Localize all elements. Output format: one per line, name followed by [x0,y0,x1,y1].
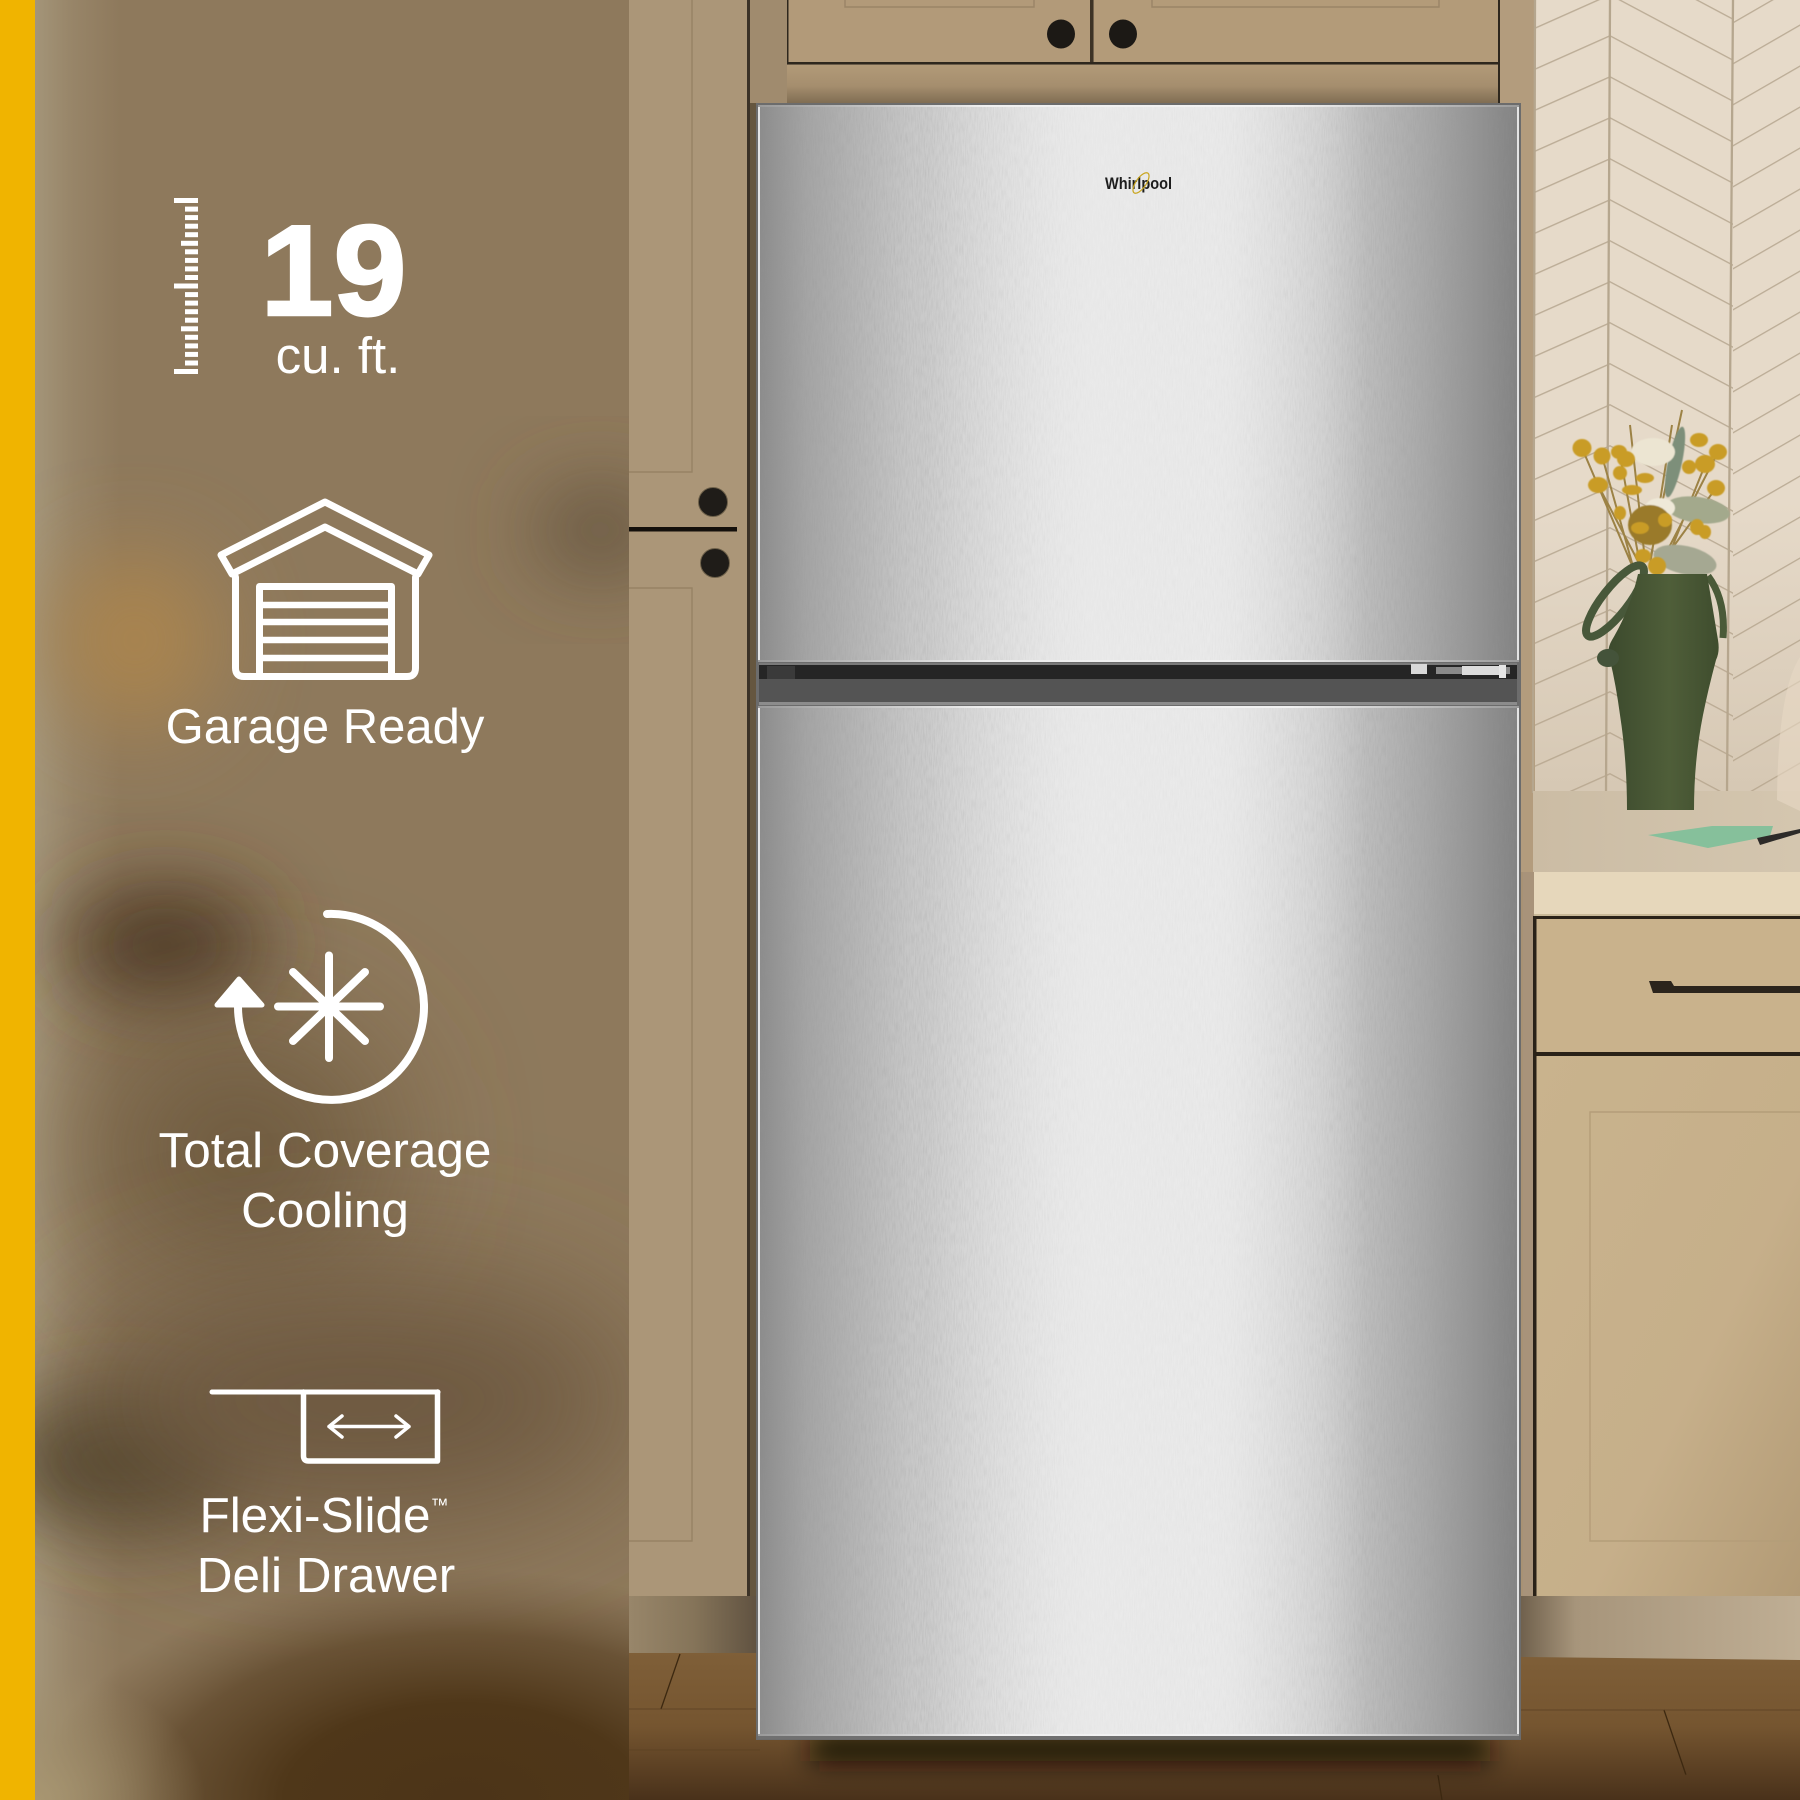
Whirlpool logo: Whirlpool [1105,174,1172,193]
flower stems [1582,410,1718,570]
frosted panel background [35,0,629,1800]
yellow flower heads [1572,433,1727,575]
center divider [759,663,1517,705]
drawer handle [1649,981,1800,993]
left vase handle [1578,558,1652,644]
vase with dried flowers [1572,410,1731,810]
upper cabinets above fridge [787,0,1535,1596]
icon: garage [221,502,429,676]
knob: left lower door [700,548,730,578]
icon: cooling arc with snowflake [217,914,424,1100]
background: kitchen scene [629,0,1800,1800]
countertop [1533,791,1800,916]
glass jar [1777,657,1800,811]
icon: sliding drawer [212,1392,438,1461]
number: 19: 19 [260,199,406,343]
label: Flexi-Slide Deli Drawer: ™ [431,1495,449,1515]
foliage [1628,425,1731,580]
icon: ruler [174,198,198,374]
yellow side bar [0,0,35,1800]
right vase handle [1708,576,1723,638]
shadow under fridge [810,1736,1490,1762]
label: Flexi-Slide Deli Drawer: Deli Drawer [197,1548,455,1603]
tile backsplash [1533,0,1800,793]
base cabinets [1533,916,1800,1596]
vase body [1608,574,1719,810]
label: Total Coverage Cooling: Total Coverage [159,1123,491,1178]
label: Flexi-Slide Deli Drawer: Flexi-Slide [199,1488,449,1543]
unit: cu. ft.: cu. ft. [276,327,400,384]
wood floor [629,1653,1800,1800]
label: Garage Ready: Garage Ready [166,700,485,754]
freezer door [758,105,1519,662]
refrigerator door [758,706,1519,1739]
knob: left upper door [698,488,728,516]
feature: garage ready [166,502,485,754]
feature: total coverage cooling [159,914,491,1238]
tall left cabinets [629,0,788,1603]
Whirlpool logo [1105,170,1172,196]
feature: flexi-slide deli drawer [197,1392,455,1603]
label: Total Coverage Cooling: Cooling [241,1183,409,1238]
baseboards [629,1596,1800,1660]
feature: capacity [174,198,406,384]
sticky notes and pen [1648,826,1800,848]
refrigerator [756,103,1521,1740]
